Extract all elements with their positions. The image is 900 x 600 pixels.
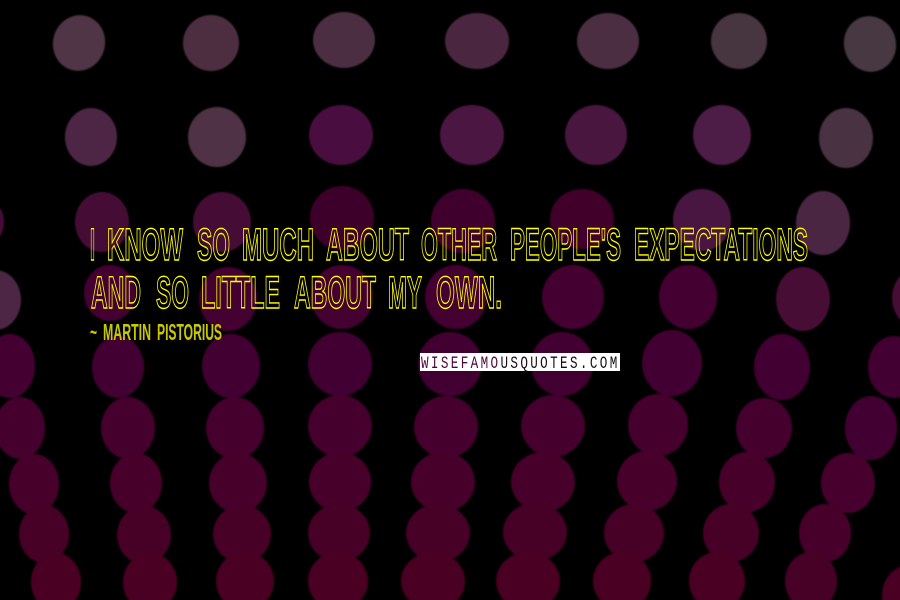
quote line 2 (91, 267, 502, 318)
site wordmark badge: WISEFAMOUSQUOTES.COM (421, 353, 620, 374)
quote line 1: SO (197, 219, 230, 270)
attribution: PISTORIUS (157, 319, 222, 345)
quote line 1: I (90, 219, 95, 270)
quote line 1: MUCH (242, 219, 314, 270)
quote line 2: LITTLE (201, 267, 280, 318)
attribution: MARTIN (103, 319, 151, 345)
quote line 2: SO (156, 267, 189, 318)
quote line 2: AND (91, 267, 141, 318)
quote line 1 (90, 219, 808, 270)
attribution (90, 319, 222, 345)
quote text (90, 219, 808, 318)
quote line 1: OTHER (421, 219, 497, 270)
quote line 2: ABOUT (294, 267, 376, 318)
attribution: ~ (90, 319, 97, 345)
quote line 1: KNOW (107, 219, 183, 270)
quote line 1: PEOPLE'S (510, 219, 621, 270)
quote line 2: OWN. (436, 267, 502, 318)
quote line 2: MY (388, 267, 422, 318)
quote line 1: ABOUT (326, 219, 409, 270)
